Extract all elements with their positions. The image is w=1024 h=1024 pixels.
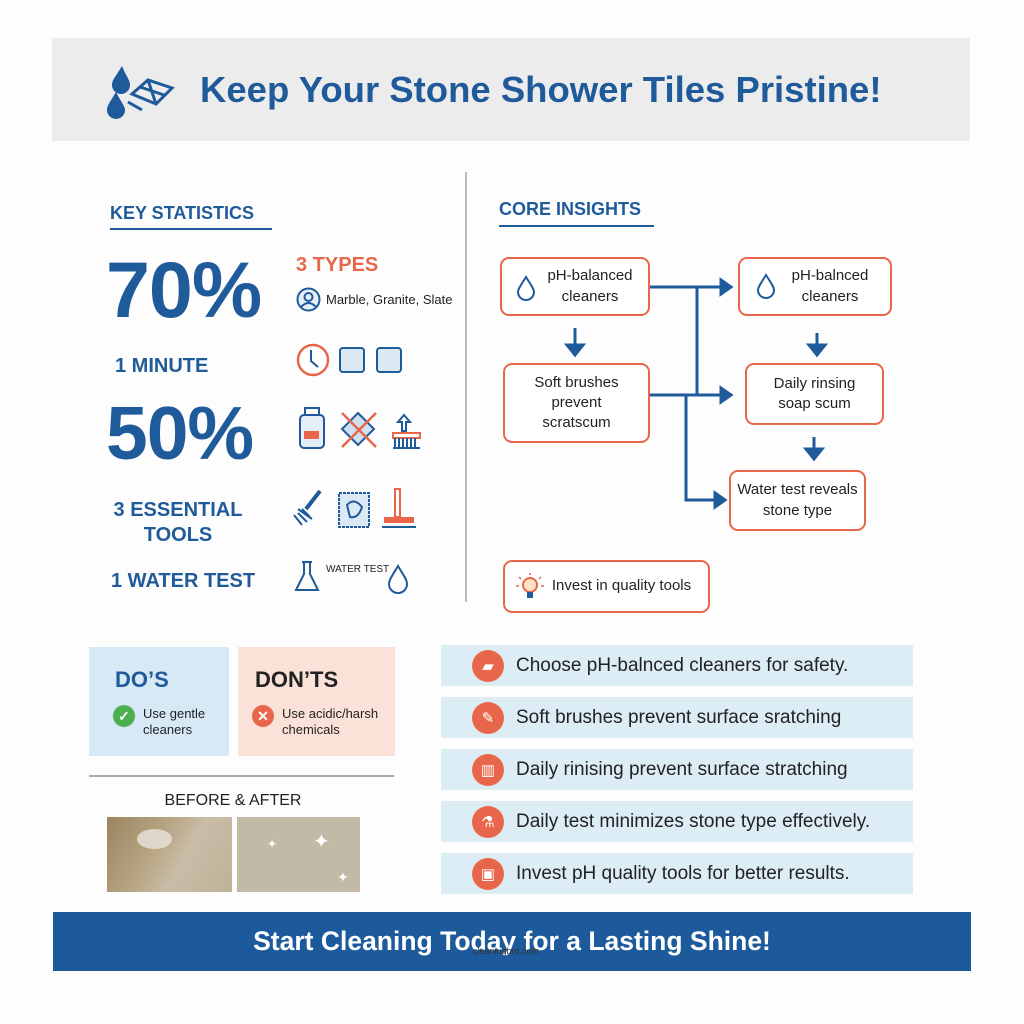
tip 1: ▰ [482, 658, 494, 674]
tip 3: Daily rinising prevent surface stratching [516, 758, 848, 780]
stat 1 water test: 1 WATER TEST [111, 570, 255, 592]
box: soft brushes: Soft brushes [534, 374, 619, 391]
icons: flask and drop [294, 561, 408, 594]
box: pH-balnced cleaners [738, 257, 892, 316]
box: soft brushes: scratscum [542, 414, 611, 431]
panel: don'ts: DON’TS [255, 667, 338, 692]
box: daily rinsing: Daily rinsing [774, 375, 855, 392]
box: invest in quality tools: Invest in quality tools [552, 577, 691, 594]
icon: cross [252, 705, 274, 727]
panel: core insights [499, 199, 892, 613]
icons: clock and tiles [296, 344, 402, 376]
image: before [107, 817, 232, 892]
image: after [237, 817, 360, 892]
flow arrows [564, 277, 828, 510]
panel: before & after: BEFORE & AFTER [165, 792, 301, 809]
heading: key statistics [110, 203, 272, 230]
tip 3: ▥ [481, 762, 495, 778]
tip 4: ⚗ [481, 814, 495, 830]
icons: tools [293, 488, 416, 528]
icon: check [113, 705, 135, 727]
image: after: ✦ [337, 869, 349, 885]
panel: do's: cleaners [143, 722, 192, 737]
icon: check: ✓ [118, 708, 130, 724]
tip 3 [441, 749, 913, 790]
box: water test [729, 470, 866, 531]
tip 4 [441, 801, 913, 842]
list: tips [441, 645, 913, 894]
box: pH-balnced cleaners: pH-balnced cleaners [792, 267, 868, 304]
icon: user and stone types [296, 288, 452, 312]
icons: flask and drop: WATER TEST [326, 564, 389, 575]
stat 3 essential tools: 3 ESSENTIAL TOOLS [114, 499, 242, 546]
box: water test: Water test reveals stone type [737, 481, 858, 518]
tip 2: Soft brushes prevent surface sratching [516, 706, 841, 728]
panel: do's: Use gentle [143, 706, 205, 721]
heading: core insights: CORE INSIGHTS [499, 199, 641, 219]
box: daily rinsing [745, 363, 884, 425]
stat 3 types: 3 TYPES [296, 254, 378, 276]
panel: do's: DO’S [115, 667, 169, 692]
footer banner: cleaningbro.com [473, 946, 539, 956]
footer banner [53, 912, 971, 971]
panel: don'ts: chemicals [282, 722, 340, 737]
box: pH-balanced cleaners: pH-balanced cleaners [547, 267, 633, 304]
icon: user and stone types: Marble, Granite, Slate [326, 292, 452, 307]
heading: key statistics: KEY STATISTICS [110, 203, 254, 223]
icon: cross: ✕ [257, 708, 269, 724]
footer banner: Start Cleaning Today for a Lasting Shine! [253, 926, 771, 956]
tip 5 [441, 853, 913, 894]
image: after: ✦ [267, 837, 277, 851]
stat 70%: 70% [106, 245, 261, 334]
panel: key statistics [106, 203, 452, 594]
box: soft brushes: prevent [551, 394, 602, 411]
tip 4: Daily test minimizes stone type effectively. [516, 810, 870, 832]
box: invest in quality tools [503, 560, 710, 613]
box: daily rinsing: soap scum [778, 395, 851, 412]
tip 1: Choose pH-balnced cleaners for safety. [516, 654, 848, 676]
tip 1 [441, 645, 913, 686]
stat 50%: 50% [106, 391, 253, 475]
panel: do's [89, 647, 229, 756]
heading: core insights [499, 199, 654, 227]
tip 2 [441, 697, 913, 738]
image: after: ✦ [313, 831, 330, 853]
tip 5: ▣ [481, 866, 495, 882]
header band [52, 38, 970, 141]
box: pH-balanced cleaners [500, 257, 650, 316]
panel: don'ts [238, 647, 395, 756]
tip 5: Invest pH quality tools for better results. [516, 862, 850, 884]
icons: bottle, crossed tile, brush [299, 407, 421, 449]
tip 2: ✎ [482, 710, 494, 726]
panel: before & after [107, 792, 360, 892]
icon: water drops and tiles [107, 66, 175, 119]
panel: don'ts: Use acidic/harsh [282, 706, 378, 721]
box: soft brushes [503, 363, 650, 443]
title: Keep Your Stone Shower Tiles Pristine! [200, 69, 882, 110]
stat 1 minute: 1 MINUTE [115, 355, 208, 377]
